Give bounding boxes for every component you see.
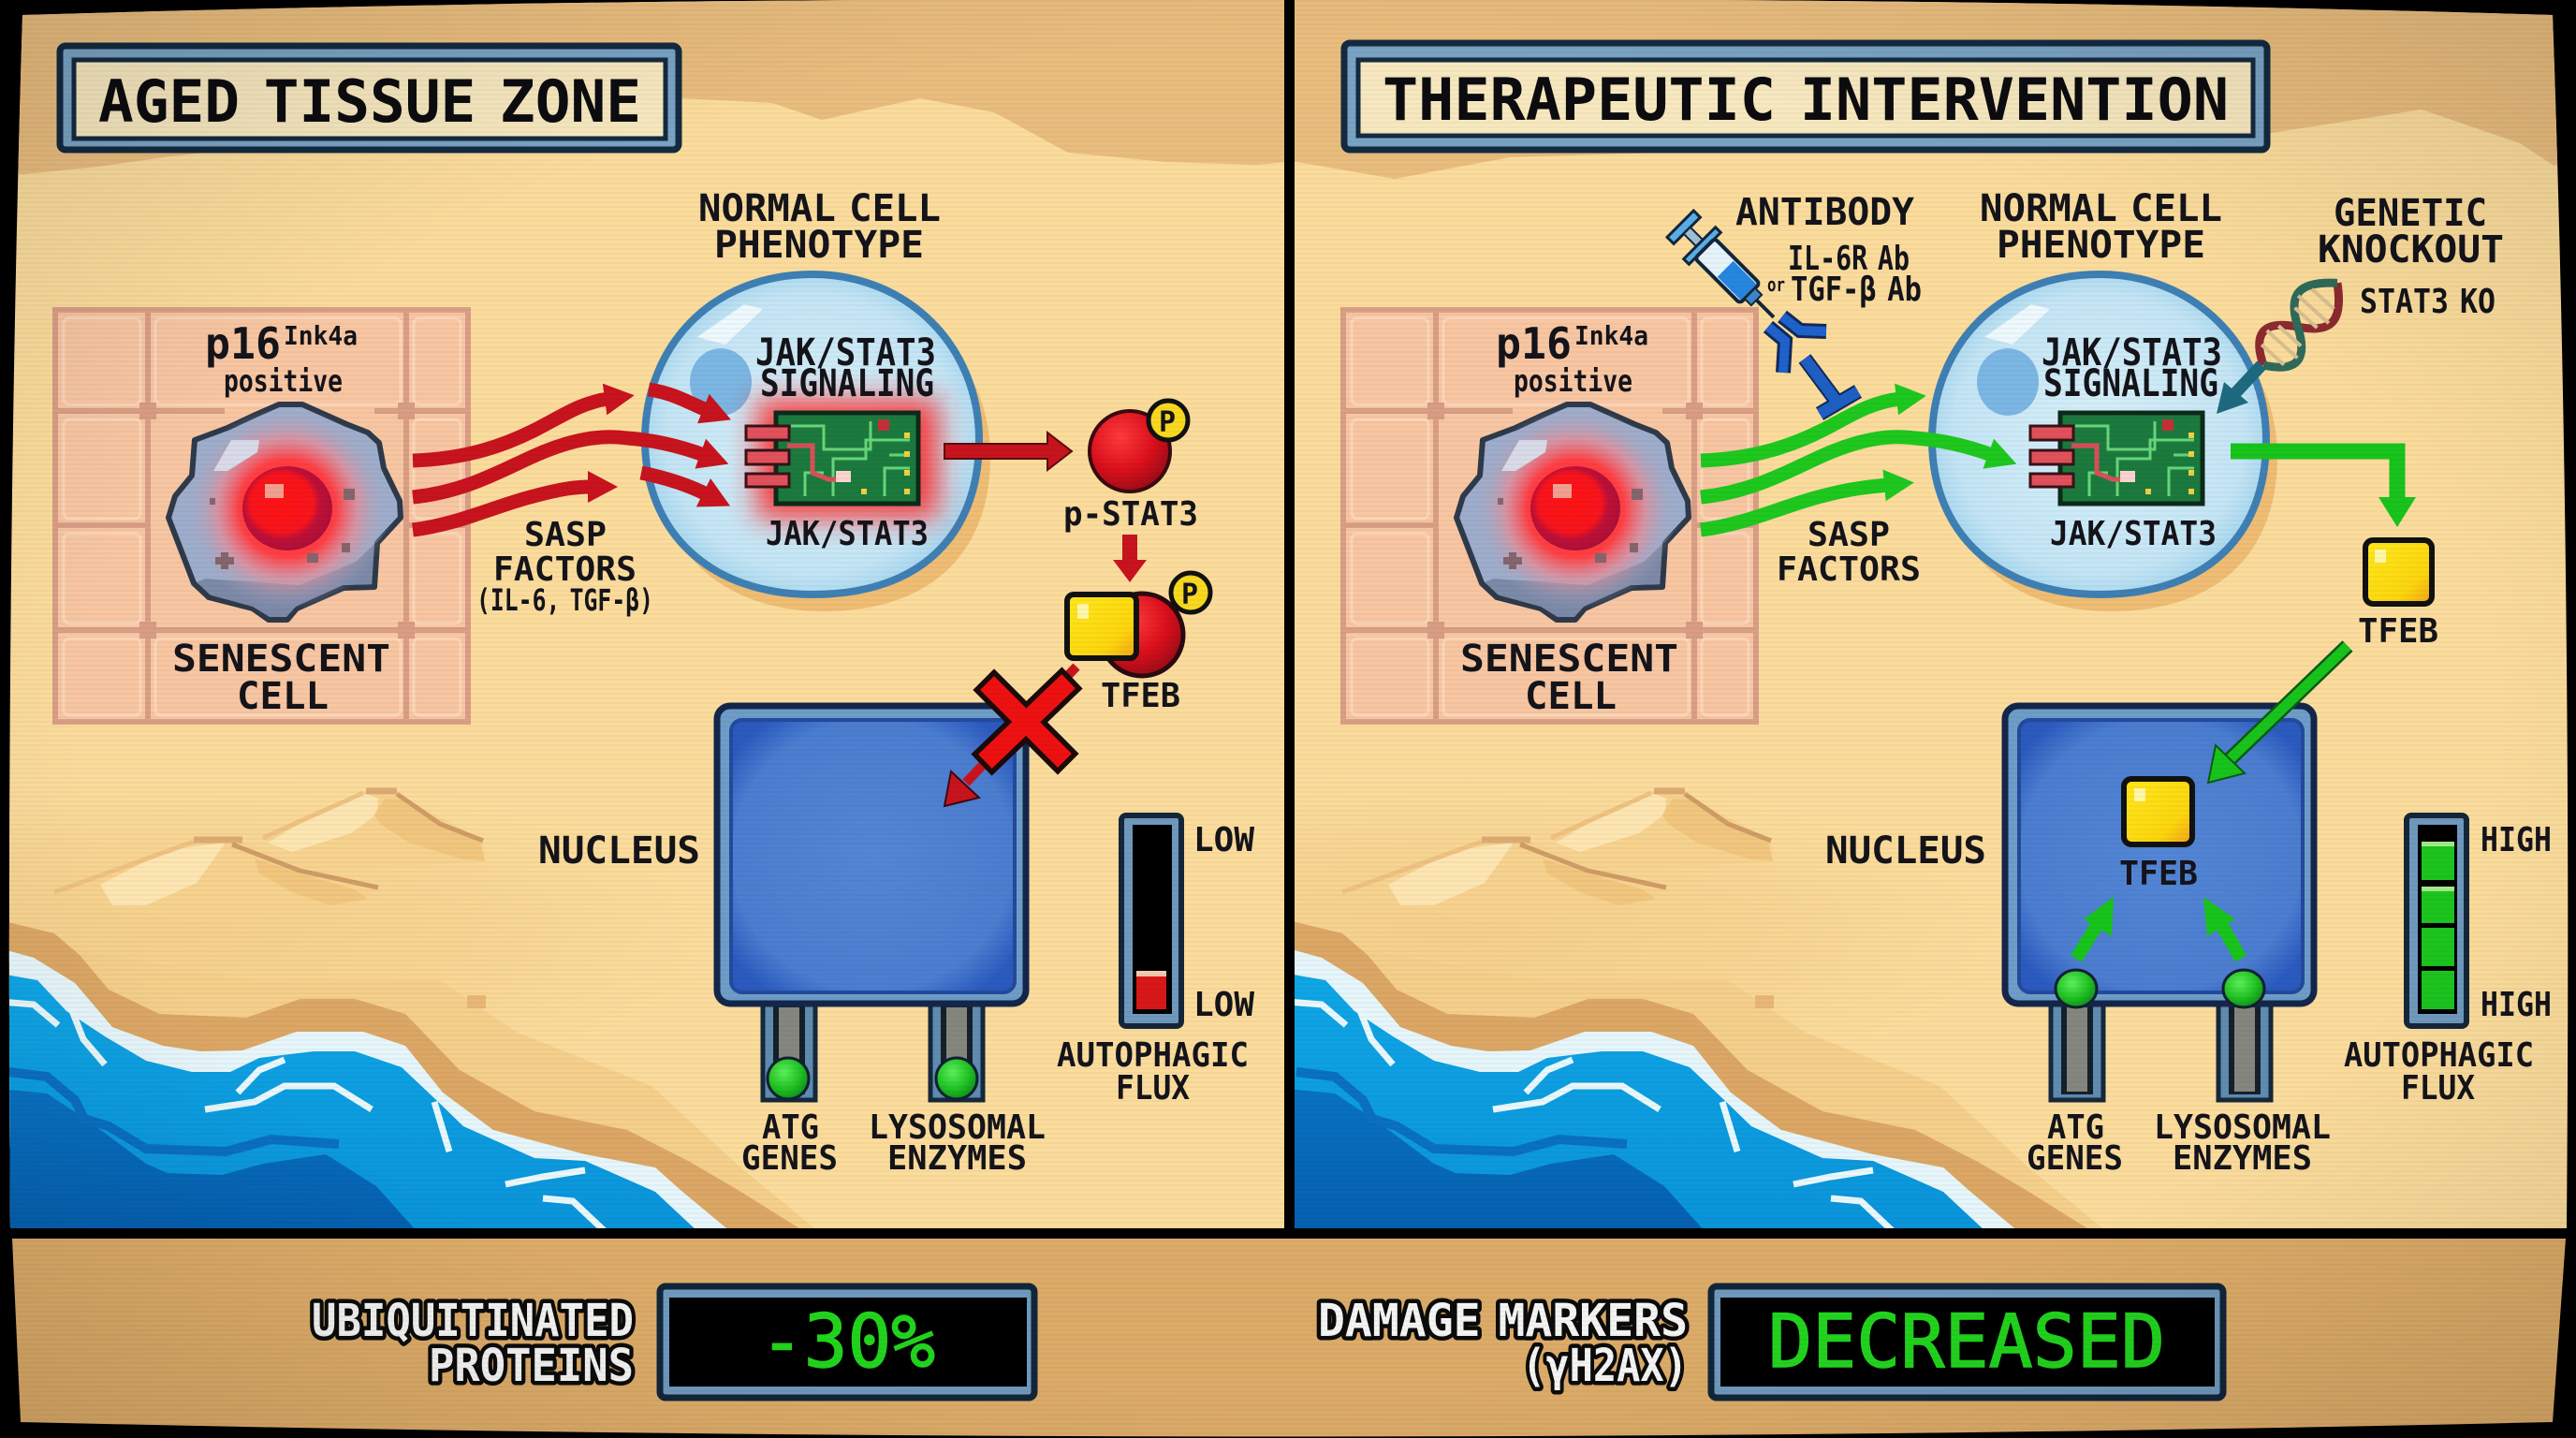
label: SASP factors right	[1777, 516, 1921, 589]
label: SASP factors left: FACTORS	[493, 550, 637, 589]
icon: inhibition bar	[1805, 359, 1858, 414]
arrows: SASP factors green	[1701, 399, 1992, 530]
label: senescent cell right: SENESCENT	[1460, 638, 1678, 681]
label: p16 left: p16	[205, 318, 281, 369]
icon: p-STAT3: P	[1159, 406, 1176, 439]
nucleus right	[2005, 706, 2314, 1100]
label: normal cell phenotype right: PHENOTYPE	[1997, 224, 2205, 267]
icon: DNA helix	[2247, 268, 2354, 380]
label: SASP factors right: SASP	[1808, 516, 1890, 554]
title: therapeutic intervention	[1344, 43, 2267, 150]
label: lysosomal enzymes left: ENZYMES	[887, 1139, 1027, 1178]
arrow: chip to p-STAT3	[944, 433, 1072, 470]
arrow: ATG activation	[2076, 897, 2114, 959]
label: p-STAT3: p-STAT3	[1063, 495, 1198, 534]
label: p16 right: positive	[1514, 363, 1632, 399]
gauge: autophagic flux high: HIGH	[2481, 821, 2552, 859]
label: normal cell phenotype right: NORMAL CELL	[1980, 187, 2222, 230]
label: SASP factors left	[476, 516, 653, 618]
label: nucleus right: NUCLEUS	[1825, 829, 1986, 873]
label: antibody: IL-6R Ab	[1788, 240, 1910, 278]
icon: ATG gene switch off	[768, 1058, 809, 1099]
gauge: autophagic flux high: FLUX	[2401, 1069, 2475, 1108]
readout: minus 30 percent	[660, 1286, 1034, 1398]
label: ATG genes right: GENES	[2027, 1139, 2123, 1178]
label: p16 right	[1496, 318, 1648, 399]
label: senescent cell left	[172, 638, 390, 718]
label: STAT3 KO: STAT3 KO	[2360, 283, 2496, 321]
icon: senescent cell left	[168, 404, 401, 620]
label: senescent cell right: CELL	[1525, 675, 1617, 718]
label: lysosomal enzymes left: LYSOSOMAL	[869, 1108, 1046, 1147]
label: signaling left	[755, 331, 936, 553]
icon: TFEB cytoplasm	[2365, 540, 2432, 604]
arrow: lysosomal activation	[2203, 897, 2241, 959]
label: genetic knockout: GENETIC	[2334, 192, 2487, 235]
panel: aged tissue zone	[0, 0, 1292, 1236]
label: normal cell phenotype left	[698, 187, 941, 267]
label: senescent cell left: CELL	[237, 675, 329, 718]
icon: TFEB in nucleus	[2124, 779, 2192, 844]
label: signaling right: JAK/STAT3	[2050, 515, 2217, 553]
label: ubiquitinated proteins	[312, 1295, 634, 1392]
label: senescent cell right	[1460, 638, 1678, 718]
icon: syringe	[1664, 208, 1790, 333]
normal cell right	[1932, 274, 2277, 611]
icon: lysosomal switch on	[2223, 970, 2264, 1007]
label: nucleus left: NUCLEUS	[538, 829, 700, 873]
label: lysosomal enzymes right: LYSOSOMAL	[2154, 1108, 2331, 1147]
icon: ATG gene switch on	[2056, 970, 2097, 1007]
label: p16 right: p16	[1496, 318, 1572, 369]
icon: p-STAT3	[1090, 401, 1188, 492]
panel: therapeutic intervention	[1295, 0, 2569, 1228]
label: TFEB right: TFEB	[2358, 612, 2438, 651]
label: p16 right: Ink4a	[1574, 320, 1648, 351]
label: TFEB nucleus: TFEB	[2119, 855, 2198, 893]
arrows: SASP factors red	[413, 389, 707, 530]
label: ATG genes right	[2027, 1108, 2123, 1178]
label: SASP factors left: (IL-6, TGF-β)	[476, 582, 653, 618]
icon: phosphorylated TFEB complex: P	[1181, 579, 1198, 611]
icon: phosphorylated TFEB complex	[1067, 573, 1210, 676]
label: senescent cell left: SENESCENT	[172, 638, 390, 681]
label: signaling right	[2042, 331, 2222, 553]
gauge: autophagic flux low	[1057, 815, 1254, 1108]
label: signaling right: JAK/STAT3	[2042, 331, 2222, 374]
gauge: autophagic flux high: AUTOPHAGIC	[2344, 1036, 2534, 1075]
readout: minus 30 percent: -30%	[760, 1300, 935, 1385]
nucleus left	[717, 706, 1026, 1100]
gauge: autophagic flux low: AUTOPHAGIC	[1057, 1036, 1249, 1075]
label: ubiquitinated proteins: PROTEINS	[429, 1340, 634, 1392]
label: SASP factors right: FACTORS	[1777, 550, 1921, 589]
icon: lysosomal switch off	[936, 1058, 977, 1099]
label: SASP factors left: SASP	[524, 516, 607, 554]
label: antibody: or	[1767, 273, 1785, 296]
title: aged tissue zone	[60, 46, 679, 150]
label: p16 left: positive	[224, 363, 343, 399]
label: lysosomal enzymes right	[2154, 1108, 2331, 1178]
senescent tissue right	[1343, 310, 1756, 722]
icon: red X block	[992, 688, 1061, 755]
label: normal cell phenotype left: NORMAL CELL	[698, 187, 941, 230]
label: normal cell phenotype right	[1980, 187, 2222, 267]
arrow: p-STAT3 to TFEB	[1113, 535, 1147, 582]
label: antibody	[1735, 191, 1922, 309]
label: ATG genes left	[741, 1108, 838, 1178]
label: damage markers: DAMAGE MARKERS	[1318, 1295, 1688, 1347]
label: genetic knockout	[2318, 192, 2504, 271]
label: ubiquitinated proteins: UBIQUITINATED	[312, 1295, 634, 1347]
arrow: knockout to signaling	[2217, 365, 2261, 414]
label: TFEB left: TFEB	[1101, 677, 1180, 715]
title: aged tissue zone: AGED TISSUE ZONE	[98, 67, 641, 136]
label: ATG genes left: GENES	[741, 1139, 838, 1178]
icon: antibody Y	[1768, 316, 1826, 373]
label: signaling left: JAK/STAT3	[755, 331, 936, 374]
title: therapeutic intervention: THERAPEUTIC INTERVENTION	[1383, 66, 2229, 134]
panel: bottom readout bar	[12, 1239, 2566, 1436]
icon: JAK/STAT3 chip right	[2030, 413, 2203, 504]
readout: decreased: DECREASED	[1768, 1300, 2165, 1385]
label: lysosomal enzymes left	[869, 1108, 1046, 1178]
gauge: autophagic flux low: LOW	[1193, 986, 1254, 1024]
senescent tissue left	[55, 310, 468, 722]
label: genetic knockout: KNOCKOUT	[2318, 228, 2504, 271]
label: p16 left	[205, 318, 358, 399]
arrow: blocked TFEB entry	[944, 667, 1076, 806]
label: ATG genes right: ATG	[2047, 1108, 2104, 1147]
label: ATG genes left: ATG	[762, 1108, 819, 1147]
label: signaling left: SIGNALING	[760, 362, 934, 405]
gauge: autophagic flux low: LOW	[1193, 821, 1254, 859]
icon: senescent cell right	[1456, 404, 1689, 620]
chip glow	[756, 399, 939, 519]
label: signaling right: SIGNALING	[2043, 362, 2218, 405]
gauge: autophagic flux high: HIGH	[2481, 986, 2552, 1024]
readout: decreased	[1711, 1286, 2223, 1398]
label: signaling left: JAK/STAT3	[766, 515, 929, 553]
arrow: TFEB into nucleus	[2208, 646, 2348, 783]
gauge: autophagic flux high	[2344, 815, 2552, 1108]
normal cell left	[645, 274, 990, 611]
label: p16 left: Ink4a	[284, 320, 358, 351]
label: damage markers: (γH2AX)	[1522, 1340, 1688, 1392]
label: antibody: ANTIBODY	[1735, 191, 1914, 234]
icon: JAK/STAT3 chip left	[746, 413, 918, 504]
gauge: autophagic flux low: FLUX	[1116, 1069, 1190, 1108]
label: antibody: TGF-β Ab	[1791, 271, 1922, 309]
arrow: chip to TFEB elbow	[2231, 451, 2416, 527]
label: damage markers	[1318, 1295, 1688, 1392]
label: normal cell phenotype left: PHENOTYPE	[714, 224, 924, 267]
label: lysosomal enzymes right: ENZYMES	[2173, 1139, 2312, 1178]
